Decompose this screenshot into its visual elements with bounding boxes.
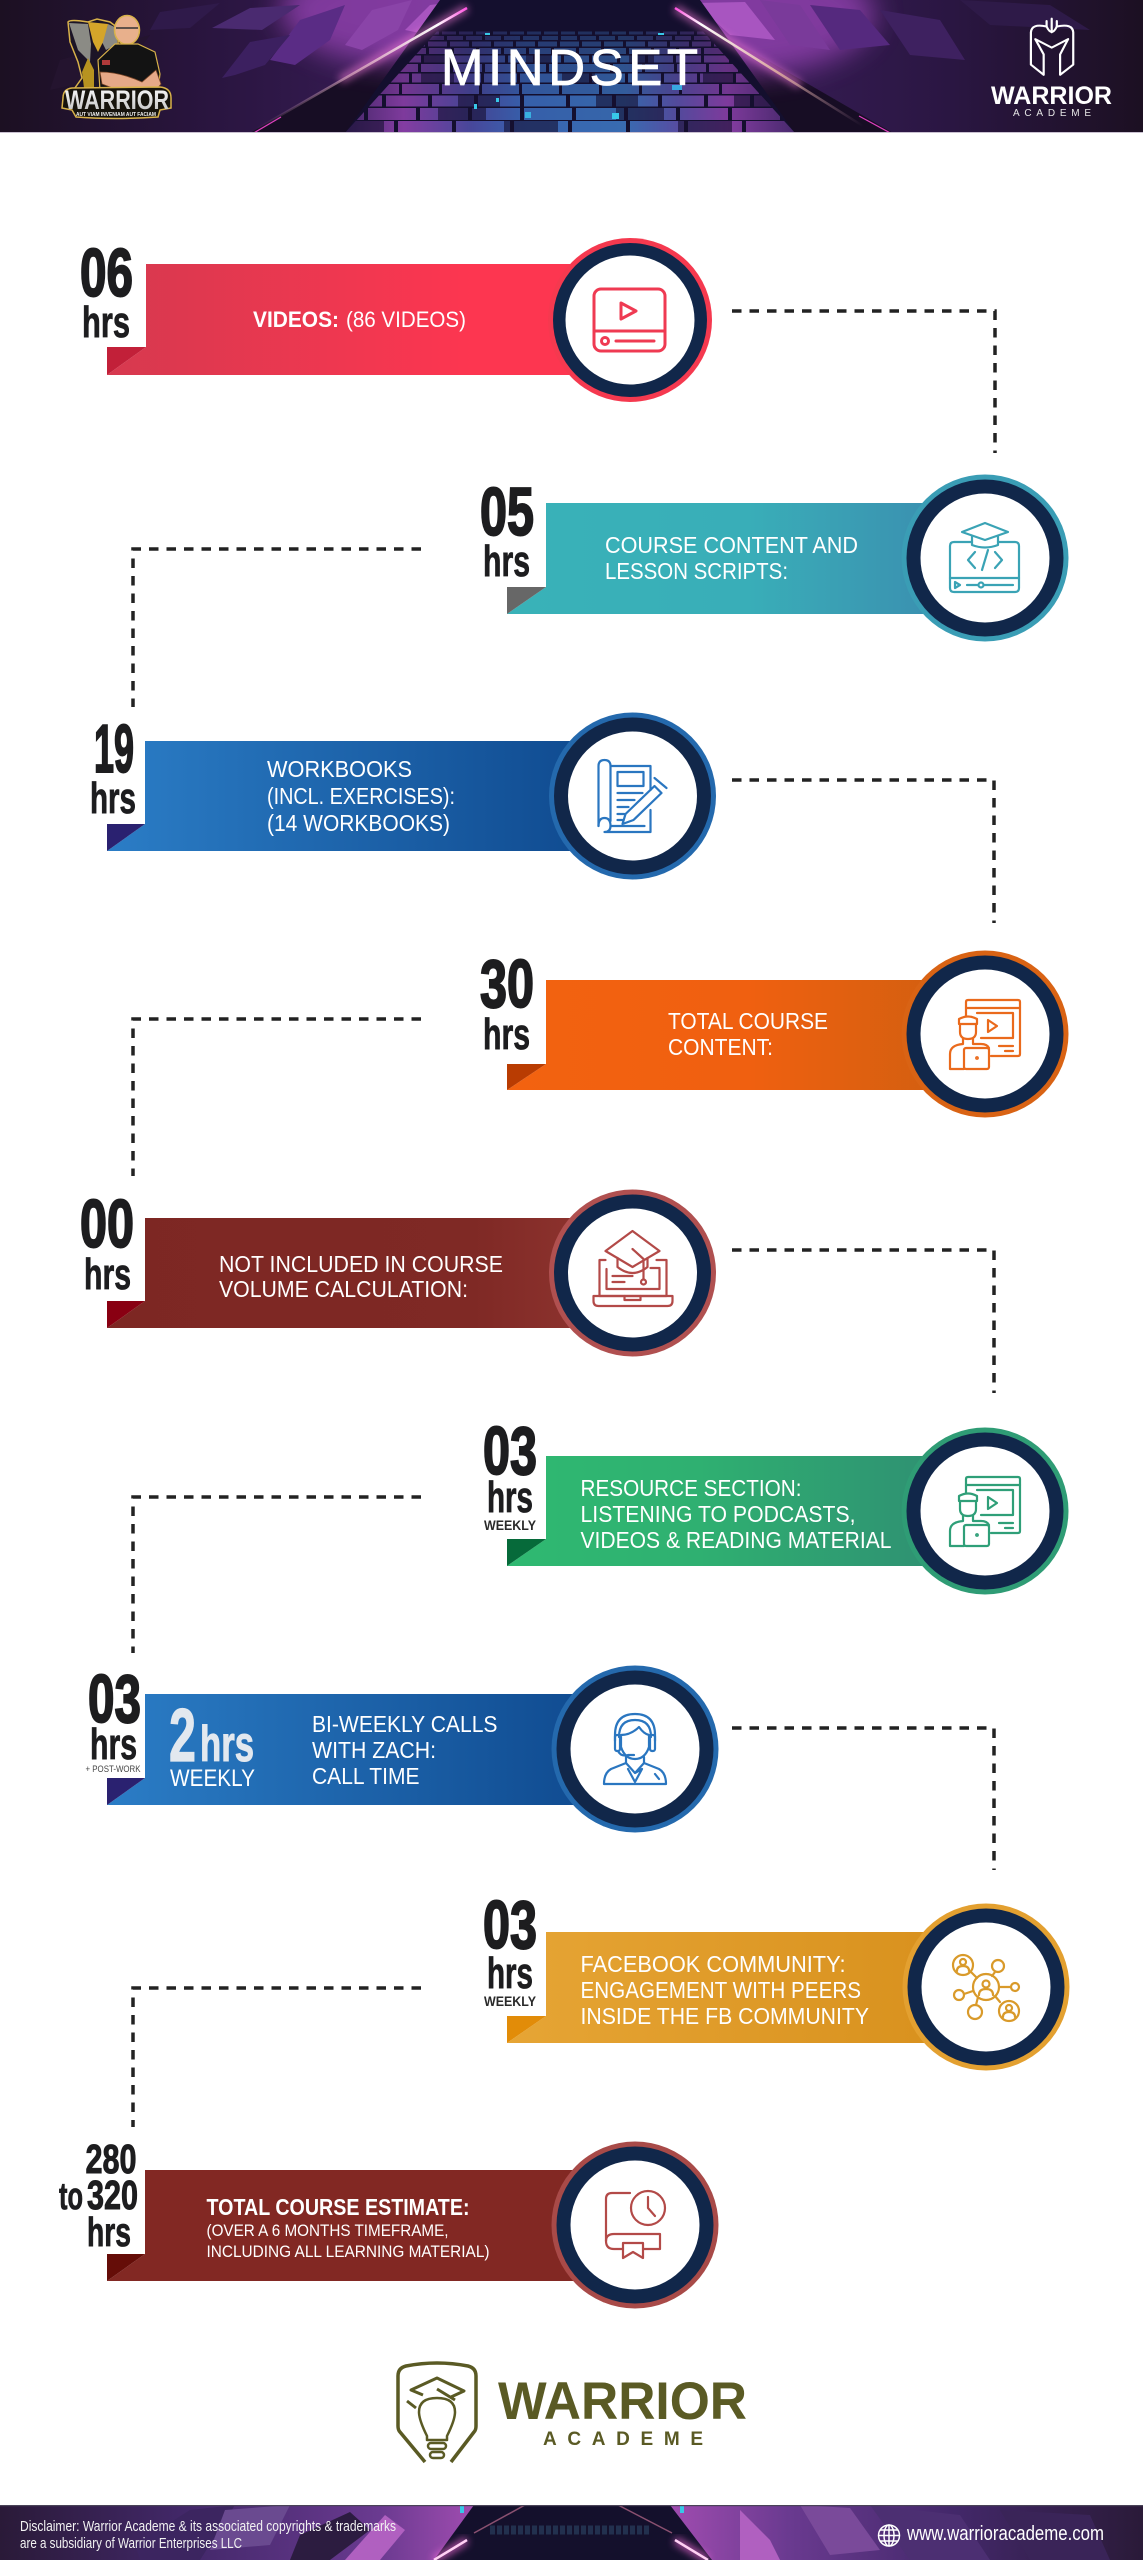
icon: presenter with video — [902, 950, 1068, 1118]
hours: 00 hrs — [80, 1186, 134, 1299]
hours: 30 hrs: hrs — [483, 1010, 530, 1059]
label: total course estimate — [206, 2194, 490, 2261]
label: not included — [219, 1251, 503, 1302]
label: total course estimate: (OVER A 6 MONTHS TIMEFRAME, — [206, 2221, 448, 2240]
connector: facebook community to total estimate — [133, 1988, 421, 2127]
logo: warrior academe (bottom): ACADEME — [543, 2429, 703, 2450]
connector: calls to facebook community — [732, 1728, 994, 1870]
panel: workbooks — [90, 711, 716, 880]
hours: 03 hrs weekly: 03 — [483, 1887, 537, 1963]
label: facebook community: ENGAGEMENT WITH PEERS — [580, 1977, 861, 2003]
label: total course estimate: TOTAL COURSE ESTIMATE: — [206, 2194, 470, 2220]
logo: warrior mascot — [62, 16, 171, 118]
connector: resource section to calls — [133, 1497, 421, 1653]
badge: 2 hrs weekly: 2 — [169, 1693, 196, 1777]
hours: 280 to 320 hrs: to — [59, 2176, 83, 2218]
hours: 05 hrs: 05 — [480, 474, 534, 550]
hours: 280 to 320 hrs: 320 — [87, 2172, 138, 2218]
label: videos: VIDEOS: — [253, 307, 339, 332]
hours: 280 to 320 hrs: hrs — [87, 2209, 131, 2255]
icon: video player — [548, 238, 712, 402]
label: bi-weekly calls — [312, 1711, 498, 1789]
panel: videos — [80, 235, 712, 402]
label: resource section: LISTENING TO PODCASTS, — [580, 1501, 856, 1527]
icon: globe — [878, 2525, 900, 2546]
panel: resource section — [483, 1413, 1068, 1594]
website: www.warrioracademe.com — [906, 2523, 1104, 2545]
icon: code lesson with cap — [902, 474, 1068, 642]
label: not included: VOLUME CALCULATION: — [219, 1276, 468, 1302]
label: workbooks — [267, 756, 455, 836]
label: total course content — [668, 1008, 828, 1060]
hours: 03 hrs weekly: WEEKLY — [484, 1993, 537, 2009]
panel: facebook community — [483, 1887, 1070, 2070]
hours: 00 hrs: 00 — [80, 1186, 134, 1262]
hours: 03 hrs weekly — [483, 1413, 537, 1533]
icon: workbook and pen — [549, 712, 716, 880]
hours: 05 hrs: hrs — [483, 537, 530, 586]
label: workbooks: WORKBOOKS — [267, 756, 412, 782]
label: resource section — [580, 1475, 892, 1553]
hours: 00 hrs: hrs — [84, 1250, 131, 1299]
disclaimer: are a subsidiary of Warrior Enterprises LLC — [20, 2535, 242, 2552]
title: MINDSET — [441, 39, 698, 96]
label: bi-weekly calls: WITH ZACH: — [312, 1737, 436, 1763]
label: total course content: TOTAL COURSE — [668, 1008, 828, 1034]
badge: 2 hrs weekly: WEEKLY — [170, 1765, 255, 1792]
hours: 19 hrs: hrs — [90, 774, 136, 823]
label: course content: LESSON SCRIPTS: — [605, 558, 788, 584]
label: videos — [253, 307, 466, 332]
header banner — [0, 0, 1143, 135]
hours: 280 to 320 hrs — [59, 2136, 138, 2255]
badge: 2 hrs weekly — [169, 1693, 255, 1792]
label: resource section: RESOURCE SECTION: — [580, 1475, 802, 1501]
icon: headset agent — [552, 1666, 718, 1832]
logo: warrior mascot: AUT VIAM INVENIAM AUT FACIAM — [76, 112, 156, 118]
panel: course content and lesson scripts — [480, 474, 1068, 642]
hours: 30 hrs: 30 — [480, 946, 534, 1022]
hours: 03 hrs post-work: hrs — [90, 1720, 137, 1769]
label: workbooks: (INCL. EXERCISES): — [267, 783, 455, 809]
hours: 03 hrs weekly: 03 — [483, 1413, 537, 1489]
hours: 30 hrs — [480, 946, 534, 1059]
hours: 05 hrs — [480, 474, 534, 586]
hours: 03 hrs post-work — [86, 1661, 141, 1775]
icon: laptop with graduation cap — [549, 1190, 716, 1356]
footer banner — [0, 2505, 1143, 2560]
label: facebook community — [580, 1951, 869, 2029]
icon: people network — [902, 1904, 1070, 2070]
hours: 06 hrs: hrs — [82, 298, 130, 347]
hours: 03 hrs weekly: hrs — [487, 1473, 533, 1522]
label: bi-weekly calls: CALL TIME — [312, 1763, 420, 1789]
label: videos: (86 VIDEOS) — [346, 307, 466, 332]
emblem: shield with bulb and cap — [398, 2363, 476, 2462]
panel: bi-weekly calls — [86, 1661, 718, 1832]
label: course content: COURSE CONTENT AND — [605, 532, 858, 558]
hours: 03 hrs post-work: + POST-WORK — [86, 1764, 141, 1775]
connector: workbooks to total course content — [732, 780, 994, 923]
connector: total course content to not included — [133, 1019, 421, 1176]
icon: book and clock — [552, 2142, 718, 2308]
connector: videos to course content — [732, 311, 995, 453]
disclaimer — [20, 2518, 396, 2552]
disclaimer: Disclaimer: Warrior Academe & its associated copyrights & trademarks — [20, 2518, 396, 2535]
logo: warrior academe (header): WARRIOR — [991, 82, 1112, 110]
connector: course content to workbooks — [133, 549, 421, 707]
hours: 280 to 320 hrs: 280 — [86, 2136, 136, 2182]
icon: presenter with video — [902, 1428, 1068, 1594]
hours: 03 hrs weekly — [483, 1887, 537, 2009]
hours: 06 hrs: 06 — [80, 235, 133, 311]
label: course content — [605, 532, 858, 584]
hours: 19 hrs — [90, 711, 136, 823]
label: resource section: VIDEOS & READING MATERIAL — [580, 1527, 892, 1553]
label: workbooks: (14 WORKBOOKS) — [267, 810, 450, 836]
hours: 19 hrs: 19 — [94, 711, 134, 787]
logo: warrior mascot: WARRIOR — [65, 85, 169, 115]
label: total course content: CONTENT: — [668, 1034, 773, 1060]
panel: total course estimate — [59, 2136, 718, 2308]
connector: not included to resource section — [732, 1250, 994, 1393]
logo: warrior academe (header) — [991, 19, 1112, 119]
logo: warrior academe (bottom): WARRIOR — [498, 2372, 747, 2431]
label: facebook community: INSIDE THE FB COMMUNITY — [580, 2003, 869, 2029]
logo: warrior academe (bottom) — [398, 2363, 747, 2462]
panel: not included in course volume — [80, 1186, 716, 1356]
label: bi-weekly calls: BI-WEEKLY CALLS — [312, 1711, 498, 1737]
hours: 03 hrs weekly: WEEKLY — [484, 1517, 537, 1533]
label: total course estimate: INCLUDING ALL LEARNING MATERIAL) — [206, 2242, 490, 2261]
hours: 03 hrs weekly: hrs — [487, 1949, 533, 1998]
label: not included: NOT INCLUDED IN COURSE — [219, 1251, 503, 1277]
badge: 2 hrs weekly: hrs — [200, 1716, 254, 1772]
hours: 06 hrs — [80, 235, 133, 347]
label: facebook community: FACEBOOK COMMUNITY: — [580, 1951, 846, 1977]
logo: warrior academe (header): ACADEME — [1013, 108, 1091, 119]
hours: 03 hrs post-work: 03 — [88, 1661, 141, 1737]
panel: total course content — [480, 946, 1068, 1118]
